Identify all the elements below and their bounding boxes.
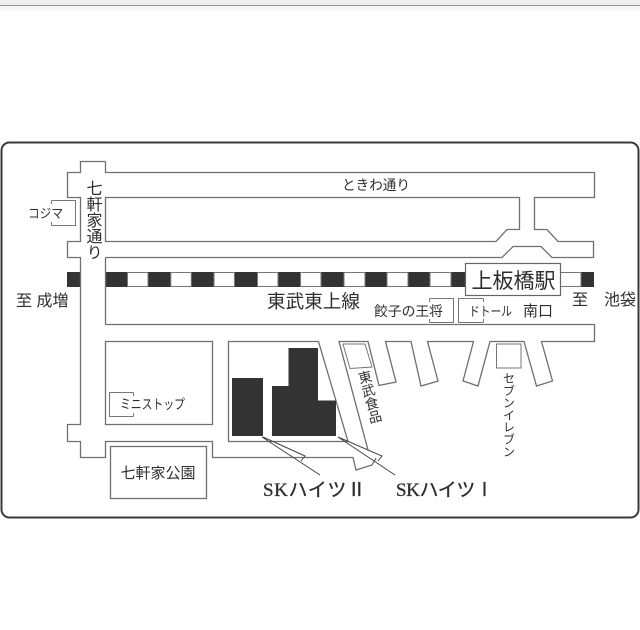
shop: Tobu Shokuhin — [343, 344, 383, 426]
destination: Narimasu: 至 成増 — [16, 292, 68, 310]
map frame — [2, 142, 638, 518]
street name: Shichikenya-dori: 七軒家通り — [84, 180, 102, 260]
leader lines — [262, 437, 395, 475]
shop: Seven-Eleven: セブンイレブン — [501, 372, 515, 457]
shop: Doutor: ドトール — [469, 304, 512, 319]
park: 七軒家公園 — [120, 465, 196, 482]
buildings: SK heights — [232, 348, 336, 436]
shop: Ministop: ミニストップ — [120, 397, 185, 412]
shop: Doutor — [458, 298, 512, 322]
shop: Seven-Eleven — [496, 344, 521, 457]
top browser strip — [0, 0, 640, 10]
railway name: 東武東上線 — [267, 291, 360, 312]
station box: 上板橋駅 — [472, 270, 556, 293]
shop: Ministop — [110, 392, 185, 416]
park — [110, 446, 206, 498]
shop: Tobu Shokuhin: 東武食品 — [355, 369, 383, 426]
shop: Kojima: コジマ — [28, 206, 63, 221]
destination: Ikebukuro — [572, 291, 636, 309]
destination: Ikebukuro: 至 — [572, 292, 588, 309]
shop: Gyoza no Osho: 餃子の王将 — [374, 304, 443, 319]
label: SK Heights I: SKハイツⅠ — [396, 480, 494, 501]
shop: Kojima — [28, 200, 76, 226]
destination: Ikebukuro: 池袋 — [604, 291, 636, 309]
road network — [68, 162, 594, 470]
south exit: 南口 — [523, 303, 553, 320]
station box — [466, 264, 560, 296]
railway track — [67, 272, 594, 287]
shop: Gyoza no Osho — [374, 298, 454, 322]
label: SK Heights II: SKハイツⅡ — [263, 480, 366, 501]
street name: Tokiwa-dori: ときわ通り — [342, 177, 410, 193]
